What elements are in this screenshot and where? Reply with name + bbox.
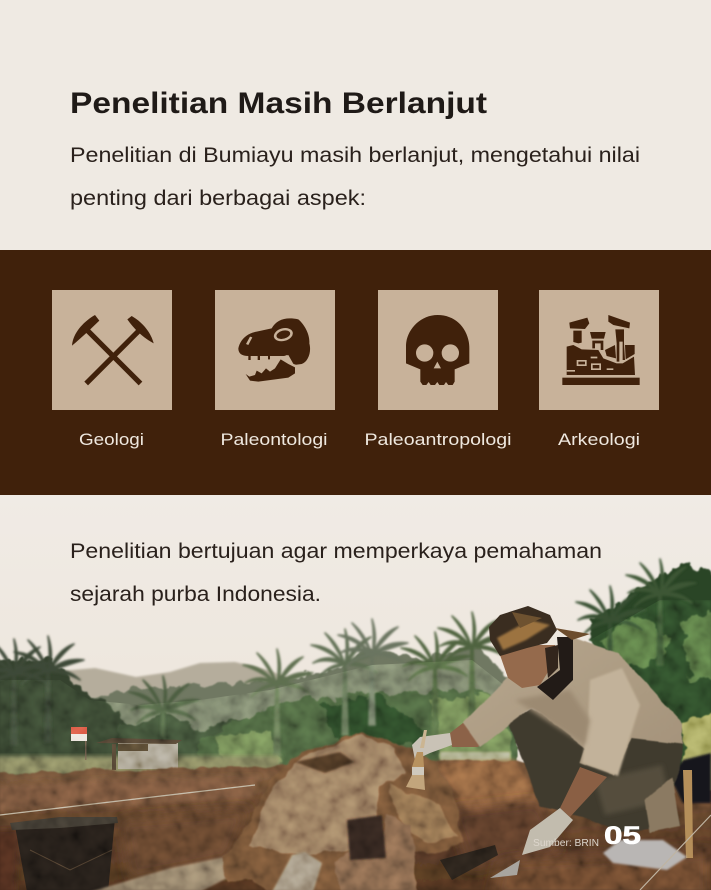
label: Arkeologi xyxy=(558,430,640,449)
stake xyxy=(683,770,693,858)
headscarf xyxy=(489,606,557,656)
distant hills xyxy=(50,662,320,730)
tile: Geologi xyxy=(52,290,172,449)
gloves and brush xyxy=(412,733,452,760)
bucket xyxy=(10,817,118,890)
panel: research aspects band xyxy=(0,250,711,495)
label: Geologi xyxy=(79,430,144,449)
flag xyxy=(71,727,87,760)
page number: 05 xyxy=(604,822,641,850)
fossil skull and tusks xyxy=(90,733,498,890)
icon: human skull xyxy=(406,315,469,385)
survey string right xyxy=(640,815,711,890)
tile: Arkeologi xyxy=(539,290,659,449)
survey string xyxy=(0,785,255,815)
boot xyxy=(645,778,680,832)
tree masses xyxy=(0,565,711,790)
label: Paleoantropologi xyxy=(364,430,512,449)
palms xyxy=(0,559,696,782)
archaeologist xyxy=(406,606,683,855)
front forearm xyxy=(560,767,607,817)
text block: intro xyxy=(70,144,640,210)
face xyxy=(500,645,557,688)
text block: purpose: sejarah purba Indonesia. xyxy=(70,583,321,606)
ground and foliage texture xyxy=(0,600,711,890)
bag xyxy=(670,753,711,803)
icon: dinosaur skull xyxy=(238,318,310,382)
field strip xyxy=(0,756,280,776)
text block: purpose: Penelitian bertujuan agar memperkaya pemahaman xyxy=(70,540,602,563)
trousers xyxy=(507,708,683,832)
label: Paleontologi xyxy=(220,430,328,449)
tile: Paleontologi xyxy=(215,290,335,449)
shirt xyxy=(463,637,683,775)
icon: crossed rock hammers xyxy=(72,315,154,385)
neck scarf xyxy=(537,637,573,700)
plastic bag xyxy=(603,840,687,870)
icon: temple ruins xyxy=(562,315,640,385)
text block: intro: Penelitian di Bumiayu masih berlanjut, mengetahui nilai xyxy=(70,144,640,167)
back forearm xyxy=(450,723,490,747)
trowel xyxy=(490,860,520,878)
text block: purpose xyxy=(70,540,602,606)
tile: Paleoantropologi xyxy=(364,290,512,449)
source note: Sumber: BRIN xyxy=(533,837,599,849)
excavated ground xyxy=(0,760,711,890)
text block: intro: penting dari berbagai aspek: xyxy=(70,187,366,210)
title: Penelitian Masih Berlanjut xyxy=(70,87,487,120)
panel: photo of excavation site xyxy=(0,495,711,890)
hut xyxy=(96,738,182,770)
